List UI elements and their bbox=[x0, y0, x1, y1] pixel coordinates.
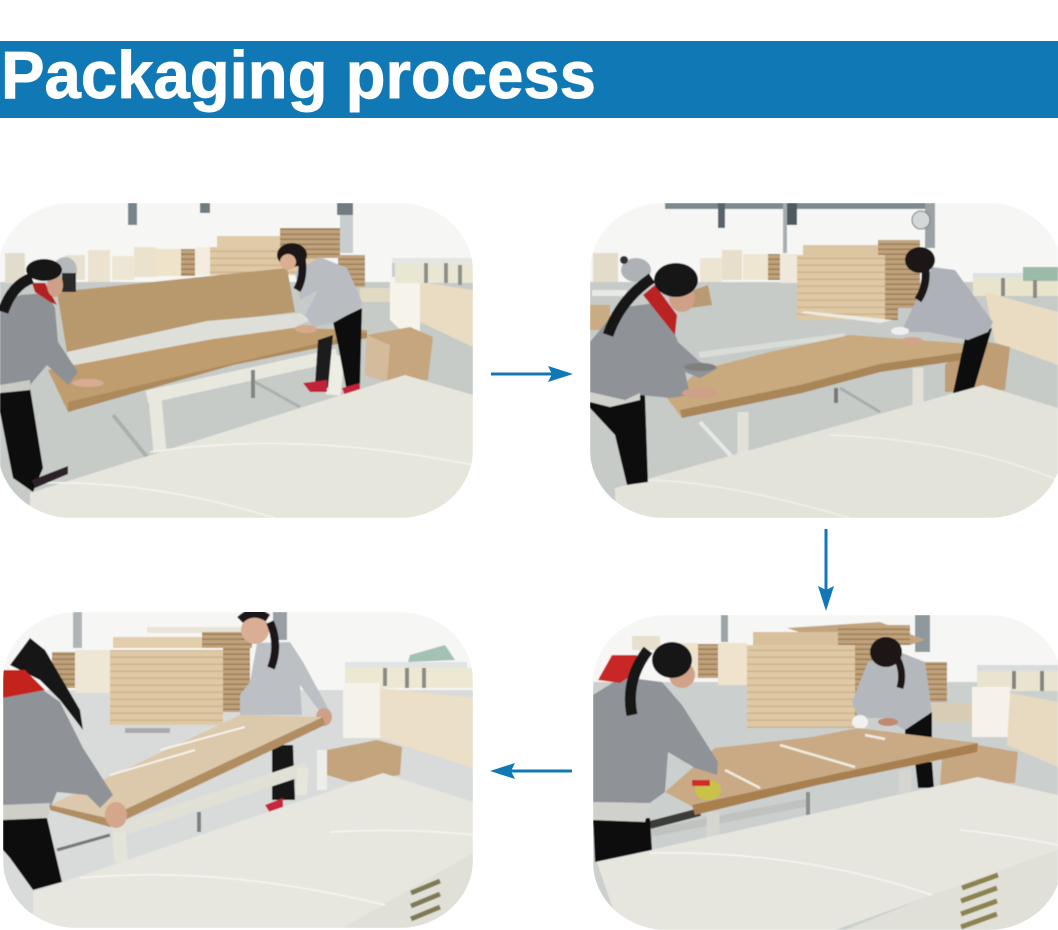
cabinet with rail bbox=[973, 267, 1058, 365]
arrow: step 2 to step 3 bbox=[818, 529, 834, 611]
left worker bbox=[590, 263, 718, 485]
cardboard sheet being lifted bbox=[50, 715, 325, 827]
right worker bbox=[891, 247, 993, 393]
icon: wall fan bbox=[912, 211, 930, 229]
background stacks bbox=[5, 228, 390, 302]
cardboard box bbox=[317, 740, 402, 790]
cabinet with rail bbox=[343, 645, 473, 768]
panel: step 3 photo bbox=[593, 615, 1058, 930]
table frame bbox=[700, 368, 918, 458]
background stacks bbox=[590, 240, 920, 330]
cabinet with rail bbox=[972, 665, 1058, 767]
panel: step 4 photo bbox=[3, 612, 473, 928]
background worker bbox=[53, 257, 77, 292]
table frame bbox=[113, 355, 337, 457]
foreground board bbox=[615, 385, 1058, 518]
cardboard box bbox=[365, 327, 433, 382]
cardboard box bbox=[940, 745, 1018, 785]
left worker bbox=[3, 638, 127, 890]
foreground board bbox=[33, 773, 473, 928]
table frame bbox=[57, 768, 307, 862]
foreground board bbox=[597, 777, 1058, 930]
background worker bbox=[620, 256, 651, 282]
left worker bbox=[0, 259, 104, 492]
flat cardboard sheet bbox=[48, 328, 367, 412]
left worker with tape roll bbox=[593, 642, 721, 862]
panel: step 2 photo bbox=[590, 203, 1058, 518]
title text: Packaging process bbox=[1, 38, 596, 113]
background stacks bbox=[632, 622, 972, 728]
arrow: step 3 to step 4 bbox=[490, 763, 572, 779]
icon: tape roll bbox=[692, 780, 721, 800]
right worker bbox=[277, 243, 362, 396]
background stacks bbox=[52, 627, 252, 733]
cabinet with rail bbox=[390, 258, 473, 348]
cardboard sheet with tape bbox=[665, 728, 978, 815]
cardboard sheet on table bbox=[667, 335, 985, 418]
right worker bbox=[240, 613, 332, 813]
foreground board bbox=[30, 375, 473, 518]
far table strip bbox=[698, 333, 845, 358]
table frame bbox=[650, 770, 905, 838]
right worker bbox=[852, 637, 934, 788]
cardboard box bbox=[945, 338, 1010, 392]
protective film bbox=[67, 313, 308, 366]
standing cardboard sheet bbox=[57, 268, 295, 352]
arrow: step 1 to step 2 bbox=[491, 366, 573, 382]
title banner bbox=[0, 38, 1058, 118]
panel: step 1 photo bbox=[0, 203, 473, 518]
